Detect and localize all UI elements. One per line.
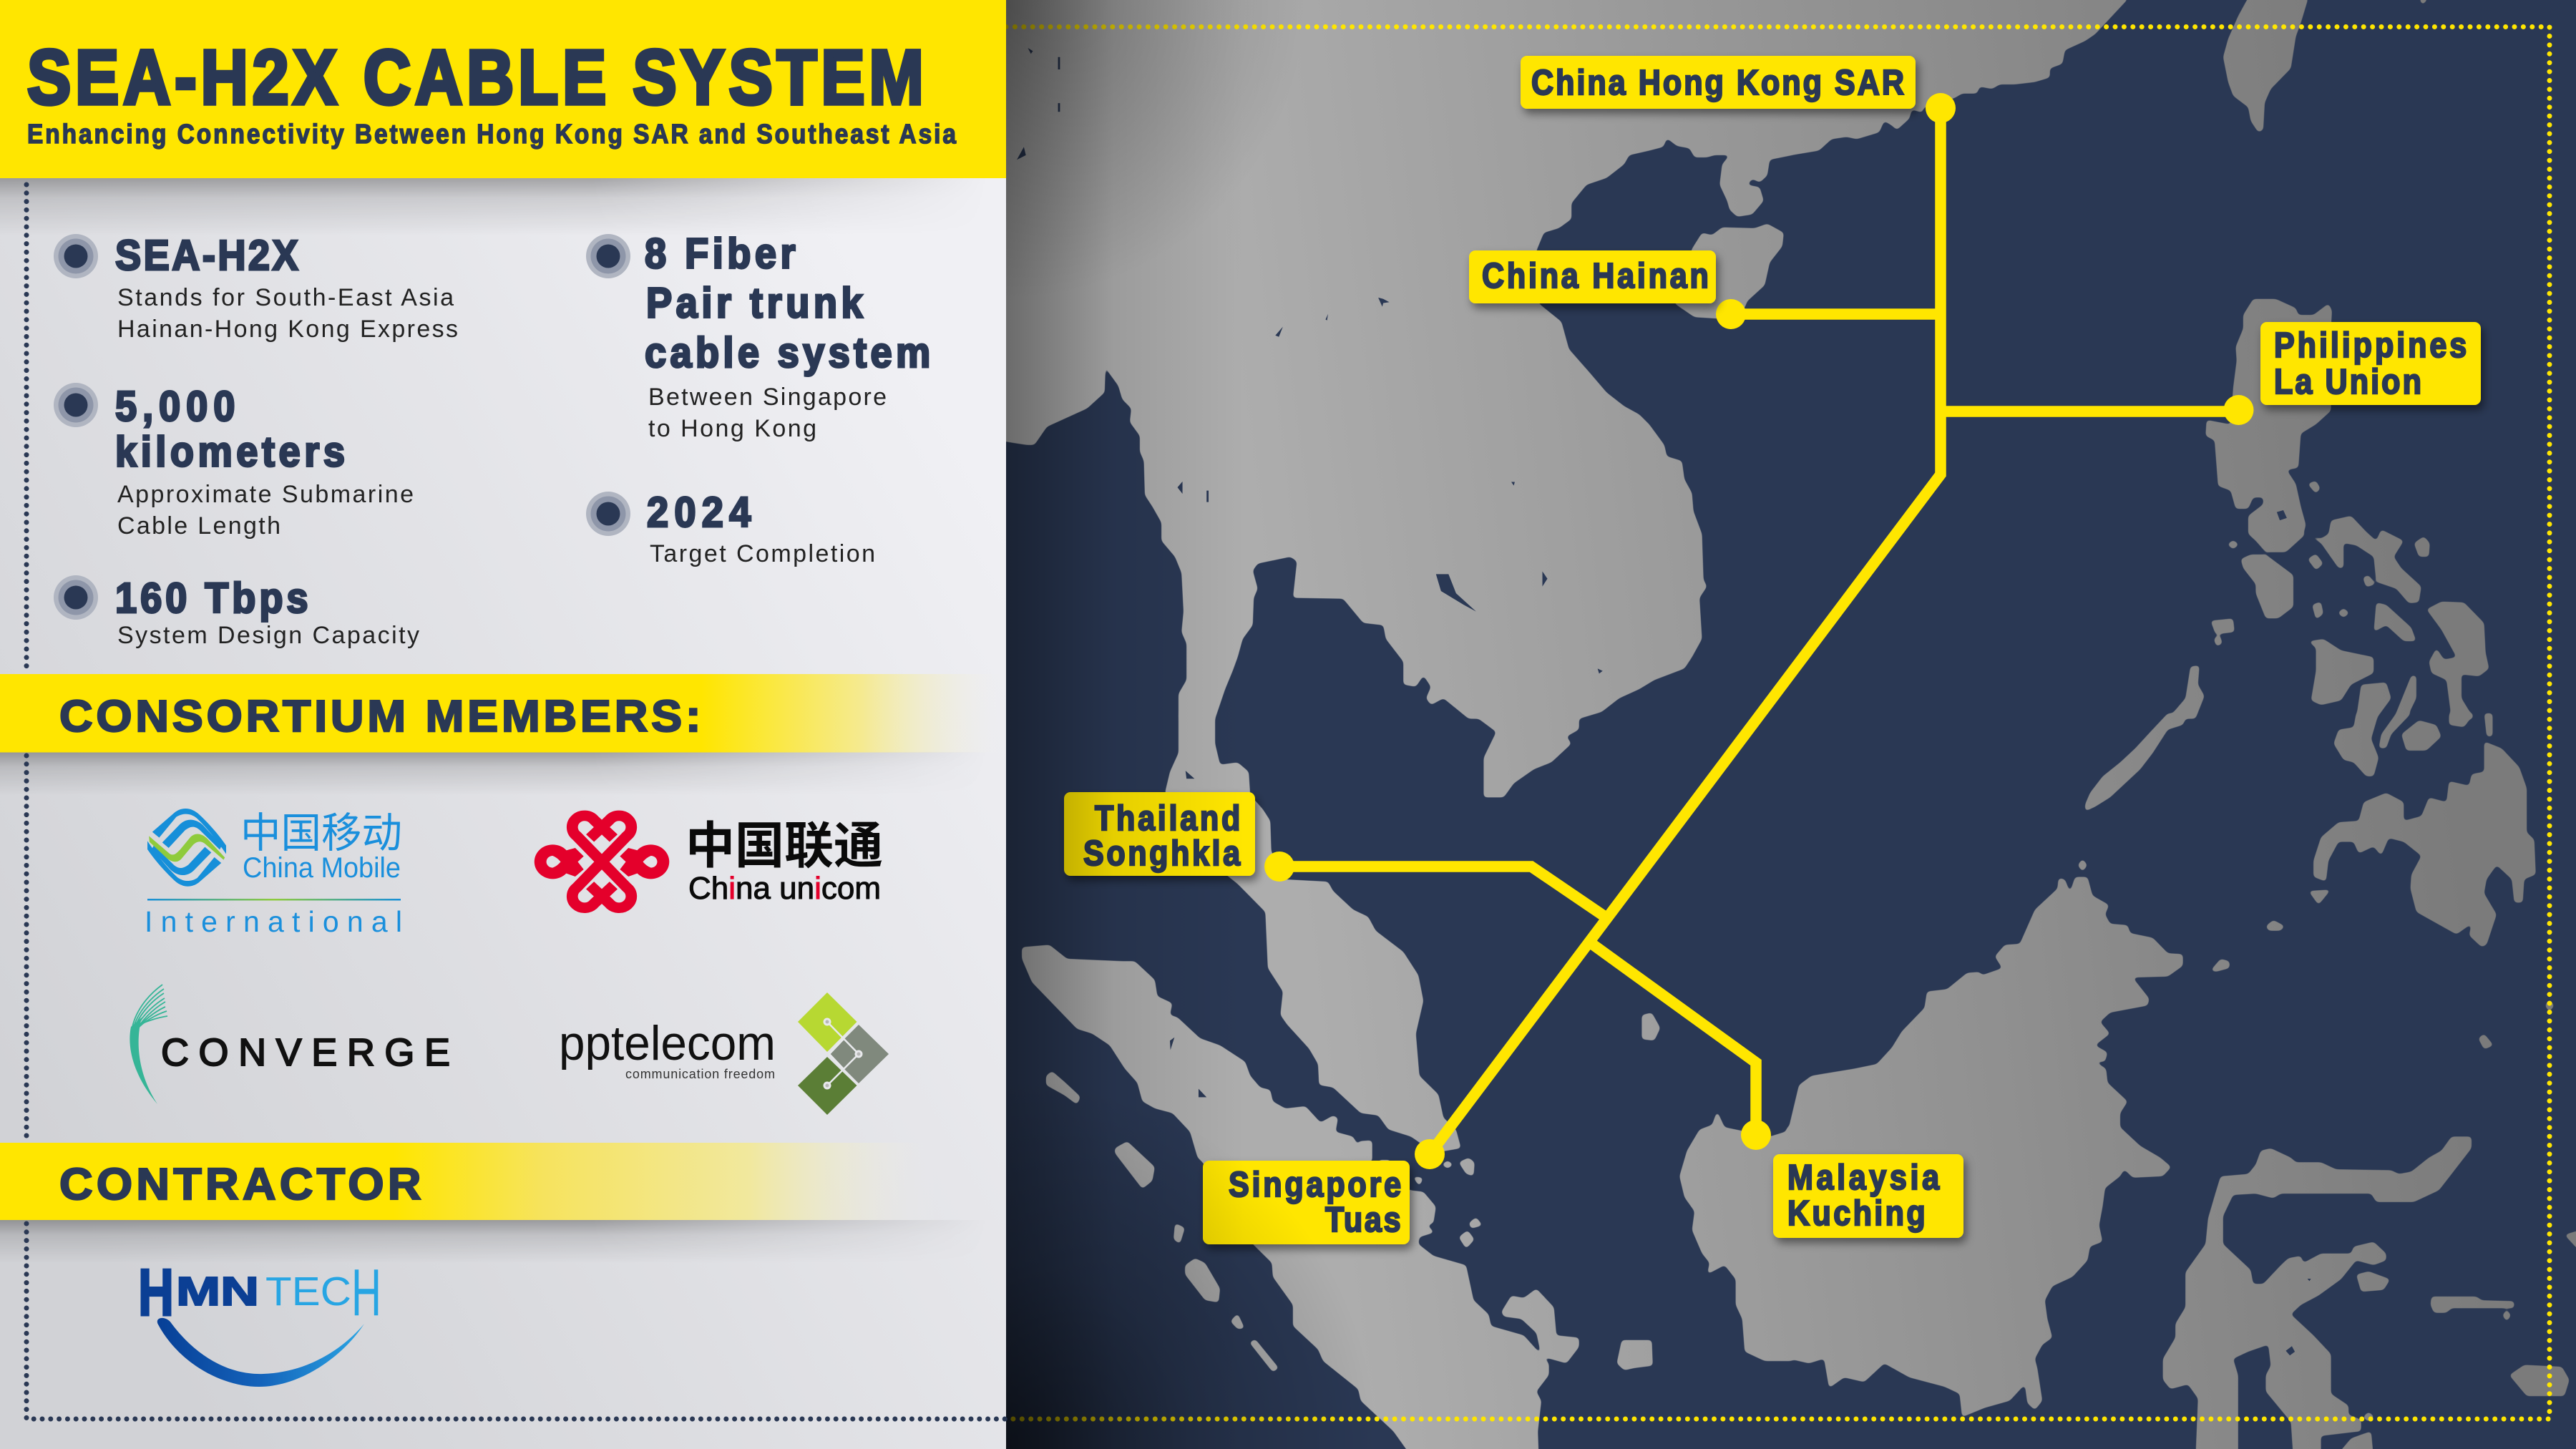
label: Malaysia Kuching (1773, 1154, 1963, 1238)
panel: map background (1006, 0, 2576, 1449)
logo: China Mobile International: 中国移动 (240, 810, 402, 857)
stat: 8 Fiber Pair trunk cable system (586, 230, 930, 442)
heading: consortium members (0, 674, 1006, 753)
logo: China Unicom: China unicom (688, 871, 881, 906)
stat: SEA-H2X (54, 233, 458, 343)
logo: China Mobile International (145, 809, 402, 938)
cable: Hainan branch (1731, 308, 1936, 320)
stat: 8 Fiber Pair trunk cable system: Pair trunk (646, 280, 863, 327)
logo: China Mobile International: International (145, 905, 402, 938)
logo: Converge (130, 985, 450, 1104)
stat: 5,000 kilometers: Cable Length (117, 512, 280, 540)
dot: Songkhla (1264, 852, 1294, 882)
label: China Hong Kong SAR: China Hong Kong SAR (1531, 62, 1904, 102)
logo: HMN Tech (138, 1255, 381, 1387)
icon: Converge fiber feather (130, 985, 167, 1104)
dotted border: map (1006, 27, 2550, 1419)
logo: pptelecom: communication freedom (625, 1067, 775, 1081)
cable: Kuching branch (1593, 945, 1756, 1135)
label: Thailand Songhkla (1064, 792, 1255, 876)
stat: 5,000 kilometers: kilometers (115, 429, 345, 476)
logo: China Unicom: 中国联通 (686, 818, 883, 874)
icon: HMN Tech smile (157, 1318, 364, 1387)
dot: La Union (2224, 395, 2254, 425)
map vignette (1006, 0, 1382, 1449)
label: Singapore Tuas: Singapore (1229, 1164, 1401, 1204)
bullet (54, 383, 98, 427)
stat: 5,000 kilometers: Approximate Submarine (117, 481, 414, 508)
bullet (54, 575, 98, 620)
cable routes (1279, 108, 2238, 1154)
logo: Converge: CONVERGE (161, 1031, 450, 1074)
label: Philippines La Union: Philippines (2274, 325, 2467, 365)
label: Malaysia Kuching: Malaysia (1787, 1157, 1939, 1197)
bullet (586, 492, 630, 536)
logo: HMN Tech: MN (176, 1269, 259, 1314)
bullet (54, 234, 98, 278)
stat: 160 Tbps: System Design Capacity (117, 622, 419, 649)
stat: SEA-H2X: SEA-H2X (115, 233, 298, 280)
stat: 8 Fiber Pair trunk cable system: cable system (645, 330, 930, 377)
dot: Hong Kong (1926, 93, 1956, 123)
label: Philippines La Union (2260, 322, 2481, 405)
label: Thailand Songhkla: Thailand (1095, 798, 1240, 838)
cable: Songkhla branch (1279, 867, 1603, 915)
logo: pptelecom: pptelecom (559, 1016, 776, 1070)
stat: SEA-H2X: Hainan-Hong Kong Express (117, 316, 458, 343)
label: China Hainan: China Hainan (1482, 255, 1709, 296)
panel: left information column (0, 0, 1006, 1449)
dot: Kuching (1741, 1120, 1771, 1150)
stat: 5,000 kilometers (54, 383, 414, 540)
stat: 2024: 2024 (647, 489, 751, 537)
label: Singapore Tuas (1203, 1161, 1410, 1244)
stat: 5,000 kilometers: 5,000 (115, 384, 235, 431)
lakes and small water specks (1017, 48, 2311, 1355)
stat: SEA-H2X: Stands for South-East Asia (117, 284, 454, 311)
subtitle: Enhancing Connectivity Between Hong Kong SAR and Southeast Asia (27, 119, 957, 149)
cable: La Union branch (1945, 406, 2238, 417)
cable: Hong Kong to Singapore trunk (1430, 108, 1941, 1154)
label: Philippines La Union: La Union (2274, 361, 2421, 401)
icon: pptelecom diamonds (798, 992, 889, 1115)
label: Singapore Tuas: Tuas (1325, 1199, 1401, 1239)
logo: China Unicom (535, 816, 883, 908)
logo: HMN Tech: H (351, 1255, 381, 1330)
dot: Hainan (1716, 299, 1746, 329)
stat: 8 Fiber Pair trunk cable system: 8 Fiber (645, 230, 796, 278)
stat: 8 Fiber Pair trunk cable system: Between Singapore (648, 384, 887, 411)
stat: 8 Fiber Pair trunk cable system: to Hong Kong (648, 415, 816, 442)
title: SEA-H2X CABLE SYSTEM (27, 34, 924, 121)
heading: contractor: CONTRACTOR (59, 1160, 421, 1209)
header (0, 0, 1006, 178)
stat: 2024: Target Completion (650, 540, 875, 567)
icon: China Unicom knot (535, 816, 669, 908)
dotted border: panel (26, 185, 1006, 1419)
logo: pptelecom (559, 992, 889, 1115)
logo: China Mobile International: China Mobile (243, 852, 401, 884)
stat: 160 Tbps: 160 Tbps (115, 575, 308, 623)
stat: 2024 (586, 489, 875, 567)
heading: consortium members: CONSORTIUM MEMBERS: (59, 692, 701, 741)
label: China Hainan (1469, 250, 1716, 303)
label: Malaysia Kuching: Kuching (1787, 1193, 1926, 1233)
logo: HMN Tech: TEC (265, 1269, 351, 1314)
dot: Singapore (1415, 1139, 1445, 1169)
bullet (586, 234, 630, 278)
logo: HMN Tech: H (138, 1255, 174, 1330)
icon: China Mobile swirl (147, 809, 226, 887)
landing points (1264, 93, 2254, 1169)
shadows under bars (0, 178, 1006, 1263)
heading: contractor (0, 1143, 937, 1220)
label: Thailand Songhkla: Songhkla (1083, 833, 1240, 873)
stat: 160 Tbps (54, 575, 419, 649)
land masses (1006, 0, 2576, 1449)
